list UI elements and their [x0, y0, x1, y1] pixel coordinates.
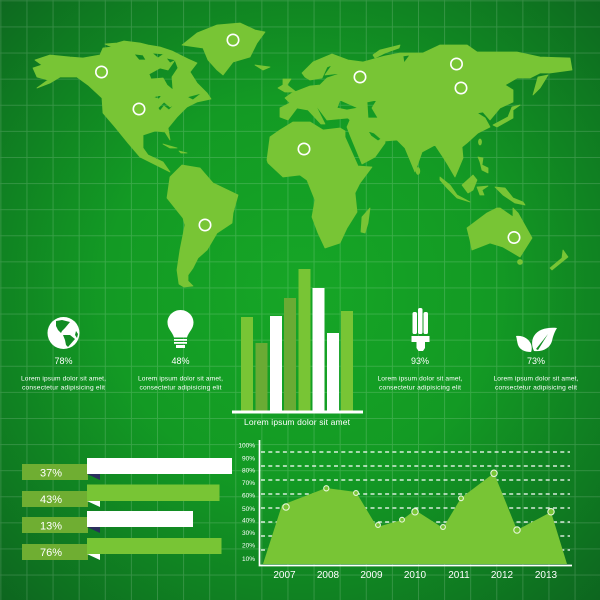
y axis labels — [238, 442, 255, 563]
icon: globe — [48, 317, 80, 349]
y axis labels: 60% — [242, 492, 255, 500]
ribbon 43% — [22, 484, 220, 507]
island: Sulawesi — [477, 186, 488, 195]
bar chart caption: Lorem ipsum dolor sit amet — [244, 417, 351, 427]
island: Taiwan — [478, 139, 482, 145]
description: Lorem ipsum dolor sit amet, — [494, 376, 579, 382]
world map — [33, 23, 572, 287]
percentage: 78% — [54, 356, 73, 366]
x axis labels: 2011 — [448, 570, 470, 581]
y axis labels: 90% — [242, 456, 255, 462]
percentage: 93% — [411, 356, 429, 366]
island: Greenland — [182, 23, 265, 75]
y axis labels: 40% — [242, 518, 255, 524]
island: New Guinea — [495, 187, 525, 205]
description line two: consectetur adipisicing elit — [140, 384, 222, 392]
x axis labels: 2009 — [360, 570, 383, 581]
continent: Australia — [467, 208, 532, 257]
ribbon 13% — [22, 511, 193, 533]
y axis labels: 70% — [242, 480, 255, 487]
percentage: 48% — [171, 356, 190, 366]
icon: CFL bulb — [412, 308, 430, 351]
island: New Zealand — [550, 250, 568, 270]
ribbon 76%: 76% — [40, 547, 62, 559]
percentage: 73% — [527, 356, 545, 366]
island: Kamchatka and Sakhalin — [533, 75, 548, 95]
island: Great Britain — [278, 79, 296, 92]
island: Japan — [493, 105, 520, 127]
continent: South America — [167, 165, 238, 287]
map location pins — [96, 34, 520, 243]
continent: Africa — [267, 122, 372, 248]
description line two: consectetur adipisicing elit — [22, 384, 105, 392]
icon: light bulb — [168, 310, 194, 348]
ribbon 43%: 43% — [40, 494, 62, 506]
continent: North America — [33, 41, 211, 172]
island: Sumatra and Java — [440, 177, 470, 202]
chart axes — [260, 440, 572, 566]
stat: light bulb — [138, 310, 223, 382]
x axis labels: 2012 — [491, 570, 514, 581]
x axis labels: 2013 — [535, 570, 558, 581]
ribbon bars — [22, 458, 232, 560]
description: Lorem ipsum dolor sit amet, — [138, 376, 223, 382]
island: Madagascar — [361, 208, 370, 233]
description: Lorem ipsum dolor sit amet, — [21, 376, 106, 382]
x axis labels: 2007 — [273, 570, 296, 581]
y axis labels: 20% — [242, 542, 255, 550]
x axis labels: 2008 — [317, 570, 340, 581]
ribbon 37% — [22, 458, 232, 480]
island: Iceland — [255, 65, 270, 70]
description line two: consectetur adipisicing elit — [495, 384, 577, 392]
bar chart — [232, 269, 363, 414]
stat: leaves — [494, 328, 579, 382]
stat: globe — [21, 317, 106, 382]
island: Caribbean — [163, 144, 187, 153]
description: Lorem ipsum dolor sit amet, — [378, 376, 463, 382]
area series — [263, 473, 567, 564]
island: Tasmania — [518, 260, 522, 264]
island: Philippines — [478, 157, 488, 173]
island: Sri Lanka — [416, 168, 420, 174]
island: Borneo — [462, 175, 477, 193]
ribbon 37%: 37% — [40, 468, 62, 480]
y axis labels: 50% — [242, 506, 255, 513]
continent: Eurasia — [280, 45, 572, 177]
island: Novaya Zemlya — [373, 45, 400, 58]
x axis labels — [273, 570, 558, 581]
icon: leaves — [516, 328, 557, 352]
y axis labels: 80% — [242, 468, 255, 474]
y axis labels: 30% — [242, 530, 255, 537]
y axis labels: 10% — [242, 556, 255, 563]
stat: energy-saving bulb — [378, 308, 463, 382]
y axis labels: 100% — [238, 442, 255, 450]
ribbon 13%: 13% — [40, 520, 62, 532]
x axis labels: 2010 — [404, 570, 427, 581]
data points — [283, 470, 554, 533]
ribbon 76% — [22, 538, 222, 560]
area chart — [238, 440, 572, 581]
description line two: consectetur adipisicing elit — [379, 384, 461, 392]
